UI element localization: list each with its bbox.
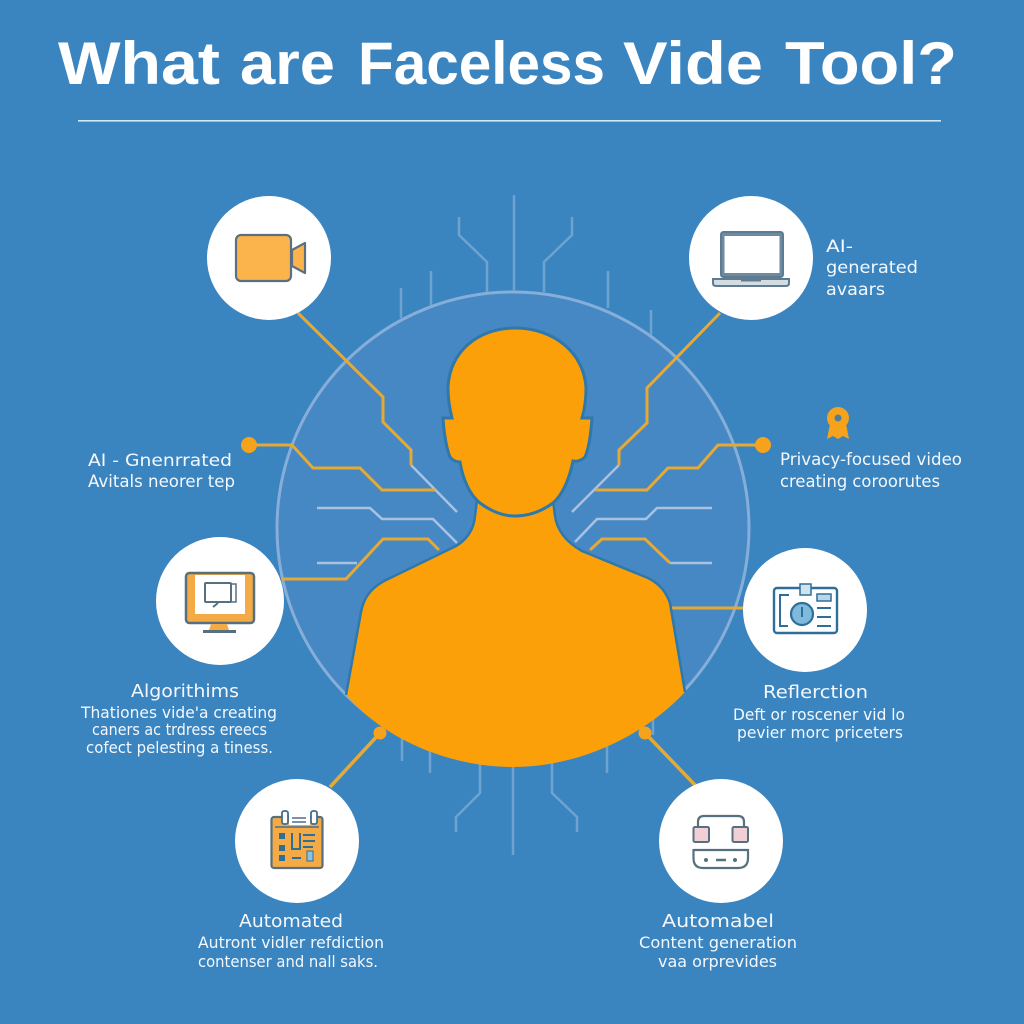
node: monitor — [156, 537, 284, 665]
node: id card — [743, 548, 867, 672]
label: privacy-focused: Privacy-focused video — [780, 450, 962, 470]
label: reflerction: Deft or roscener vid lo — [733, 705, 905, 724]
label: automated — [198, 911, 384, 971]
central person silhouette — [346, 328, 685, 767]
label: AI-generated avatars: AI- — [826, 237, 853, 257]
node: device — [659, 779, 783, 903]
node: laptop — [689, 196, 813, 320]
connector end dots — [241, 437, 771, 740]
title: are — [240, 30, 335, 97]
label: automabel: Content generation — [639, 933, 797, 952]
label: automabel — [639, 911, 797, 971]
label: algorithms: Thationes vide'a creating — [80, 703, 277, 722]
connector lines — [249, 313, 763, 787]
label: privacy-focused: creating coroorutes — [780, 472, 940, 492]
label: reflerction — [733, 682, 905, 742]
label: AI generated left — [88, 451, 235, 492]
label: AI generated left: AI - Gnenrrated — [88, 451, 232, 471]
title: What — [58, 30, 220, 97]
label: automabel: vaa orprevides — [658, 952, 777, 971]
title — [58, 30, 957, 97]
icon: ribbon — [827, 407, 849, 439]
label: AI-generated avatars: avaars — [826, 280, 885, 300]
label: automated: Automated — [239, 911, 343, 932]
label: reflerction: pevier morc priceters — [737, 723, 903, 742]
central circle — [277, 292, 749, 764]
node: calendar — [235, 779, 359, 903]
label: privacy-focused — [780, 450, 962, 492]
pale circuit lines — [317, 465, 712, 563]
label: AI generated left: Avitals neorer tep — [88, 472, 235, 492]
title rule — [78, 120, 941, 122]
label: automated: Autront vidler refdiction — [198, 933, 384, 952]
node: video camera — [207, 196, 331, 320]
label: AI-generated avatars — [826, 237, 918, 300]
label: reflerction: Reflerction — [763, 682, 868, 703]
label: AI-generated avatars: generated — [826, 258, 918, 278]
label: algorithms: caners ac trdress ereecs — [92, 720, 267, 739]
label: algorithms — [80, 681, 277, 757]
label: algorithms: cofect pelesting a tiness. — [86, 738, 273, 757]
label: automabel: Automabel — [662, 911, 774, 932]
title: Faceless — [358, 30, 605, 97]
title: Tool? — [785, 30, 957, 97]
label: algorithms: Algorithims — [131, 681, 239, 702]
title: Vide — [623, 30, 763, 97]
label: automated: contenser and nall saks. — [198, 952, 378, 971]
background circuit lines — [401, 195, 653, 855]
